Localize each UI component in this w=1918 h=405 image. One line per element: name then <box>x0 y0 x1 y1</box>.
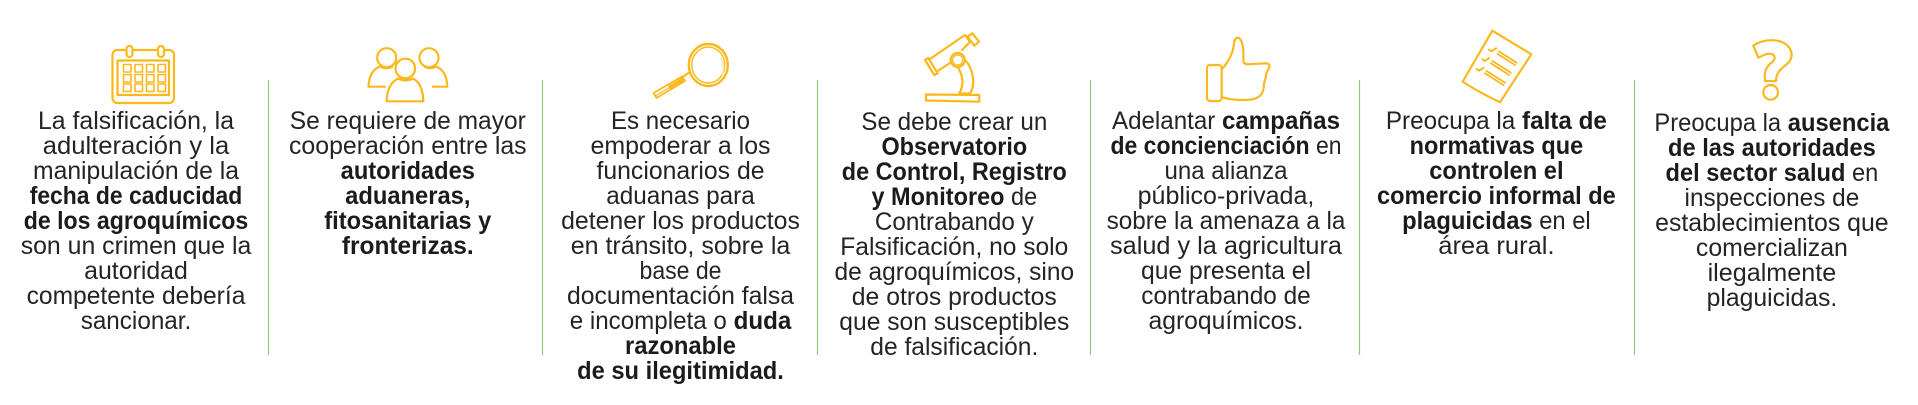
text: fecha de caducidad <box>21 107 251 335</box>
icon: question mark <box>1753 40 1792 100</box>
icon: microscope <box>925 33 979 102</box>
text: funcionarios de aduanas: Es necesario <box>611 107 750 135</box>
text: campañas de concienciación: agroquímicos. <box>1148 307 1304 335</box>
icon: group of people <box>368 48 447 101</box>
text: fecha de caducidad: de los agroquímicos <box>24 207 248 235</box>
text: ausencia de autoridades: de las autoridades <box>1668 134 1876 162</box>
text: campañas de concienciación: contrabando de <box>1141 282 1311 310</box>
panel: ausencia de autoridades <box>1654 40 1890 312</box>
text: campañas de concienciación: salud y la agricultura <box>1110 232 1342 260</box>
text: observatorio: Se debe crear un <box>861 108 1047 136</box>
text: cooperación: autoridades <box>341 157 475 185</box>
text: cooperación: aduaneras, <box>345 182 470 210</box>
text: observatorio: Falsificación, no solo <box>840 233 1068 261</box>
text: fecha de caducidad: son un crimen que la <box>21 232 251 260</box>
panel: funcionarios de aduanas <box>561 44 800 385</box>
text: fecha de caducidad: autoridad <box>84 257 188 285</box>
text: observatorio: Observatorio <box>881 133 1027 161</box>
text: campañas de concienciación: de concienciación en <box>1110 132 1341 160</box>
text: observatorio: y Monitoreo de <box>871 183 1037 211</box>
text: funcionarios de aduanas: e incompleta o duda <box>570 307 792 335</box>
text: funcionarios de aduanas <box>561 107 800 385</box>
text: funcionarios de aduanas: documentación falsa <box>567 282 794 310</box>
text: observatorio: que son susceptibles <box>839 308 1069 336</box>
text: falta de normativas: comercio informal de <box>1377 182 1616 210</box>
text: ausencia de autoridades: Preocupa la ausencia <box>1654 109 1890 137</box>
text: cooperación: cooperación entre las <box>289 132 527 160</box>
text: falta de normativas: plaguicidas en el <box>1402 207 1591 235</box>
text: funcionarios de aduanas: aduanas para <box>606 182 755 210</box>
text: fecha de caducidad: La falsificación, la <box>38 107 234 135</box>
text: observatorio: de Control, Registro <box>842 158 1067 186</box>
text: campañas de concienciación: una alianza <box>1164 157 1288 185</box>
text: cooperación <box>289 107 527 260</box>
icon: thumbs up <box>1207 38 1270 101</box>
text: fecha de caducidad: sancionar. <box>81 307 191 335</box>
text: funcionarios de aduanas: detener los productos <box>561 207 800 235</box>
text: ausencia de autoridades: del sector salud en <box>1666 159 1878 187</box>
text: observatorio: de falsificación. <box>870 333 1038 361</box>
icon: checklist <box>1463 31 1531 102</box>
text: campañas de concienciación <box>1107 107 1345 335</box>
text: campañas de concienciación: Adelantar campañas <box>1112 107 1340 135</box>
text: observatorio <box>834 108 1074 361</box>
text: funcionarios de aduanas: empoderar a los <box>590 132 770 160</box>
text: observatorio: de otros productos <box>852 283 1057 311</box>
text: funcionarios de aduanas: de su ilegitimidad. <box>577 357 784 385</box>
text: falta de normativas: Preocupa la falta de <box>1386 107 1607 135</box>
text: funcionarios de aduanas: funcionarios de <box>596 157 764 185</box>
panel: campañas de concienciación <box>1107 38 1345 335</box>
text: falta de normativas: normativas que <box>1410 132 1583 160</box>
text: fecha de caducidad: fecha de caducidad <box>30 182 242 210</box>
text: ausencia de autoridades: inspecciones de <box>1685 184 1859 212</box>
text: funcionarios de aduanas: razonable <box>625 332 736 360</box>
text: ausencia de autoridades: comercializan <box>1696 234 1848 262</box>
panel: falta de normativas <box>1377 31 1616 260</box>
text: falta de normativas <box>1377 107 1616 260</box>
text: ausencia de autoridades <box>1654 109 1890 312</box>
text: campañas de concienciación: público-privada, <box>1138 182 1314 210</box>
text: fecha de caducidad: competente debería <box>27 282 245 310</box>
panel: cooperación <box>289 48 527 260</box>
icon: calendar <box>112 46 174 103</box>
text: falta de normativas: controlen el <box>1429 157 1564 185</box>
text: cooperación: fronterizas. <box>342 232 474 260</box>
text: falta de normativas: área rural. <box>1438 232 1555 260</box>
text: ausencia de autoridades: ilegalmente <box>1708 259 1836 287</box>
panel: fecha de caducidad <box>21 46 251 335</box>
text: cooperación: fitosanitarias y <box>324 207 491 235</box>
text: funcionarios de aduanas: en tránsito, sobre la <box>571 232 790 260</box>
text: campañas de concienciación: que presenta el <box>1141 257 1311 285</box>
text: cooperación: Se requiere de mayor <box>290 107 526 135</box>
text: observatorio: de agroquímicos, sino <box>834 258 1074 286</box>
icon: magnifying glass <box>654 44 728 98</box>
text: ausencia de autoridades: plaguicidas. <box>1707 284 1837 312</box>
text: ausencia de autoridades: establecimientos que <box>1655 209 1889 237</box>
text: funcionarios de aduanas: base de <box>640 257 722 285</box>
panel: observatorio <box>834 33 1074 361</box>
text: fecha de caducidad: manipulación de la <box>33 157 239 185</box>
text: observatorio: Contrabando y <box>875 208 1034 236</box>
text: campañas de concienciación: sobre la amenaza a la <box>1107 207 1345 235</box>
text: fecha de caducidad: adulteración y la <box>43 132 229 160</box>
